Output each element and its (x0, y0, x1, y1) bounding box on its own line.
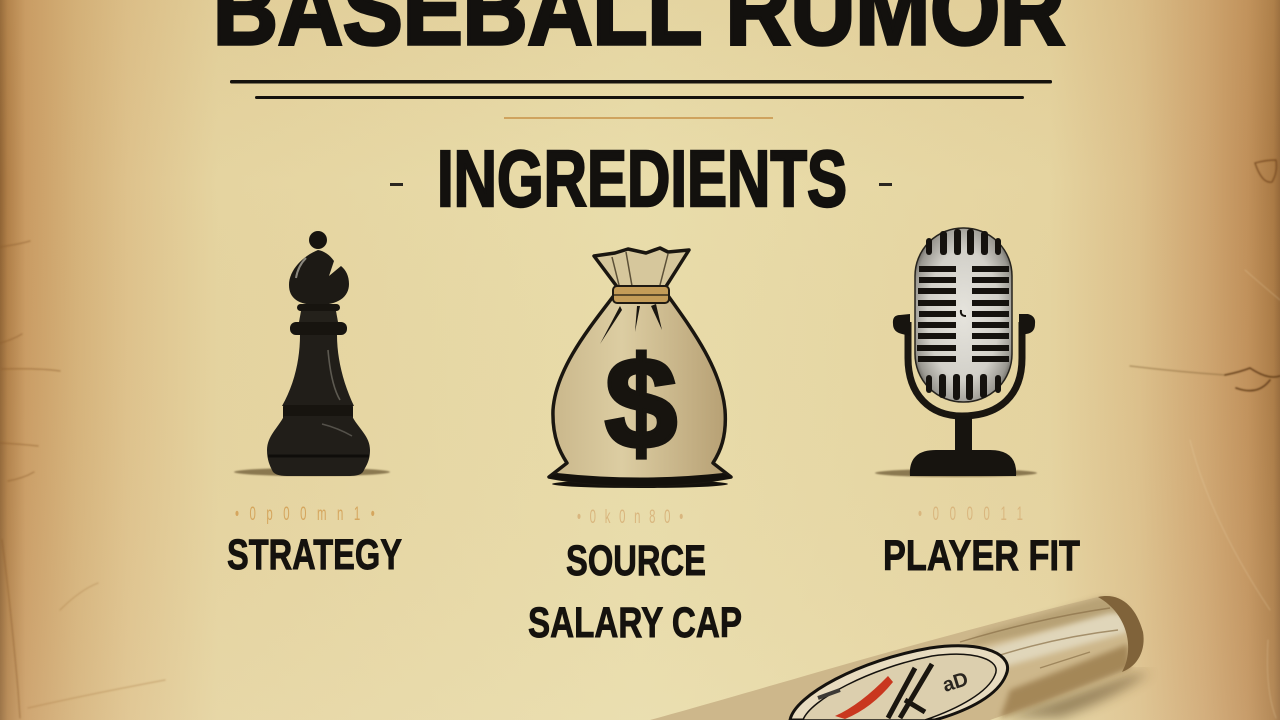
caption: source and salary cap: •0k0n80• (577, 507, 683, 528)
icon: money bag: $ (605, 330, 677, 476)
icon: baseball bat (650, 596, 1150, 720)
bat label (790, 646, 1008, 720)
bat label: aD (940, 668, 971, 697)
section heading: ingredients: INGREDIENTS (437, 134, 847, 223)
icon: microphone (875, 228, 1037, 477)
caption: strategy: •0p00mn1• (235, 504, 375, 525)
icon: chess bishop (234, 231, 390, 476)
icon: money bag (549, 248, 731, 488)
caption: strategy: STRATEGY (227, 531, 402, 579)
caption: strategy (227, 504, 402, 579)
caption: player fit: •000011 (918, 504, 1023, 525)
title rule: lower (255, 96, 1024, 99)
caption: source and salary cap: SALARY CAP (528, 599, 742, 647)
caption: player fit (883, 504, 1080, 580)
caption: source and salary cap (528, 507, 742, 647)
parchment cracks and stains (0, 160, 1280, 718)
gold rule (504, 117, 773, 119)
caption: player fit: PLAYER FIT (883, 532, 1080, 580)
title rule: upper (230, 80, 1052, 84)
caption: source and salary cap: SOURCE (566, 537, 706, 585)
